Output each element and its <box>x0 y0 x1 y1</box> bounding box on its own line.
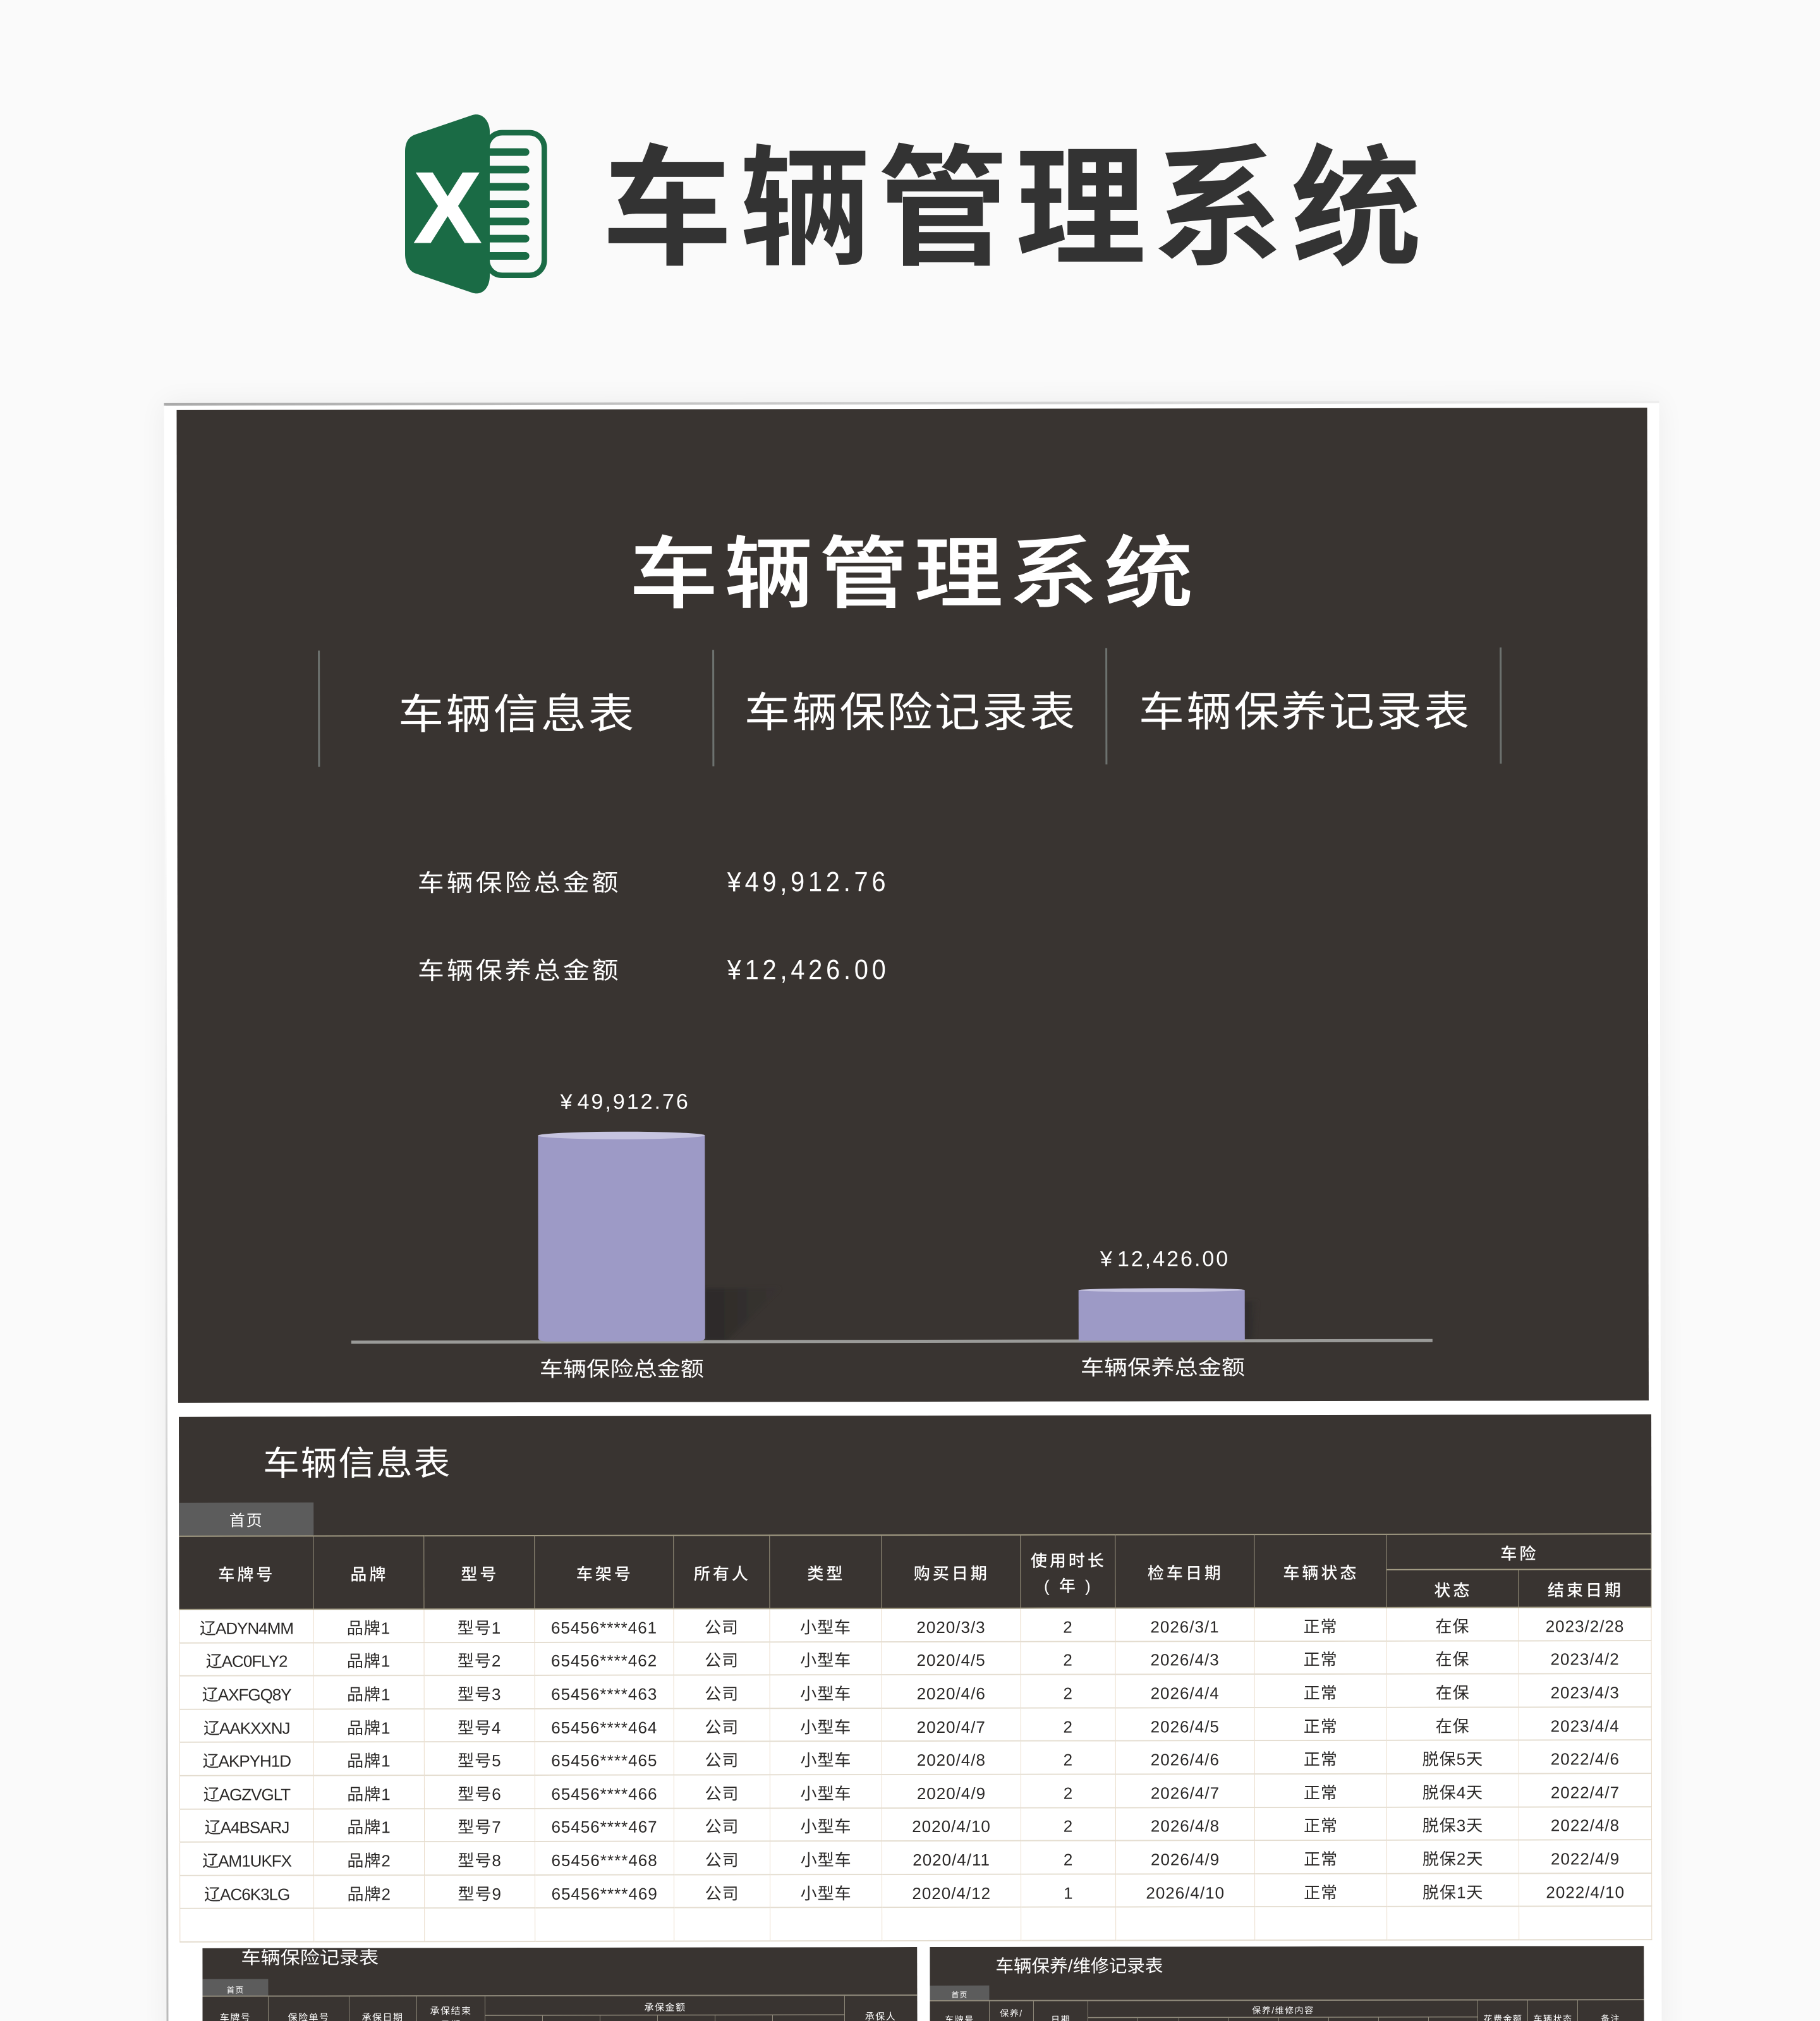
table header: 车架号 <box>576 1564 633 1583</box>
table header: 结束日期 <box>1548 1581 1623 1599</box>
table body: 公司 <box>705 1618 739 1637</box>
table body: 公司 <box>705 1751 739 1770</box>
table body: 2026/3/1 <box>1150 1617 1220 1636</box>
table header labels: 保养/维修内容 <box>1252 2005 1314 2015</box>
icon: Excel logo <box>405 114 547 293</box>
table body: 品牌1 <box>347 1685 391 1704</box>
summary: maintenance total: 车辆保养总金额 <box>418 958 621 985</box>
table body: 脱保2天 <box>1423 1850 1483 1869</box>
table body: 辽A4BSARJ <box>205 1818 289 1837</box>
heading: vehicle information: 车辆信息表 <box>263 1445 451 1483</box>
table body: 2022/4/8 <box>1551 1816 1620 1835</box>
panel: white sheet <box>164 401 1662 2021</box>
table body: 2022/4/6 <box>1551 1749 1620 1769</box>
nav item: maintenance records: 车辆保养记录表 <box>1139 688 1472 735</box>
table header: 品牌 <box>350 1565 388 1584</box>
table header: 检车日期 <box>1148 1563 1223 1582</box>
table body: 2020/4/10 <box>912 1817 991 1836</box>
table body: 2020/4/8 <box>917 1751 986 1769</box>
table body: 正常 <box>1304 1783 1338 1802</box>
table body: 65456****462 <box>551 1651 657 1670</box>
table body: 2026/4/3 <box>1150 1651 1220 1670</box>
axis label: insurance: 车辆保险总金额 <box>540 1357 704 1381</box>
table body: 公司 <box>705 1784 739 1803</box>
table: vehicle information <box>179 1533 1652 1943</box>
button: home <box>179 1502 313 1536</box>
heading: dashboard title: 车辆管理系统 <box>629 530 1199 619</box>
table header: 所有人 <box>694 1564 751 1583</box>
table body: 辽AKPYH1D <box>203 1752 291 1771</box>
table body: 2026/4/8 <box>1151 1817 1220 1836</box>
table body: 品牌2 <box>347 1884 391 1903</box>
button: home: 首页 <box>229 1512 264 1530</box>
table body: 品牌1 <box>347 1751 391 1771</box>
table body: 辽AC6K3LG <box>204 1884 289 1903</box>
table body: 65456****464 <box>551 1718 657 1737</box>
table body: 2022/4/9 <box>1551 1849 1620 1868</box>
table body: 正常 <box>1304 1650 1338 1669</box>
table body: 型号7 <box>458 1818 502 1836</box>
table header labels: 保养/ <box>1000 2008 1023 2018</box>
table body: 脱保1天 <box>1423 1883 1483 1902</box>
heading: maintenance records: 车辆保养/维修记录表 <box>995 1956 1163 1976</box>
table body: 2020/4/6 <box>917 1684 986 1703</box>
table body: 2020/4/9 <box>917 1784 986 1803</box>
table body: 2 <box>1063 1651 1073 1670</box>
table body: 脱保3天 <box>1423 1816 1483 1835</box>
table body: 2 <box>1064 1783 1073 1802</box>
table body: 2023/4/3 <box>1551 1683 1620 1702</box>
table body: 小型车 <box>800 1618 851 1637</box>
panel: insurance record preview <box>202 1947 918 2021</box>
summary: insurance total: 车辆保险总金额 <box>418 870 621 897</box>
table header: 型号 <box>461 1565 499 1584</box>
summary: insurance total: ¥49,912.76 <box>727 866 889 897</box>
table header: 类型 <box>807 1564 845 1583</box>
table body: 小型车 <box>800 1718 851 1737</box>
panel: dashboard <box>176 408 1648 1403</box>
table body: 品牌2 <box>347 1851 391 1870</box>
table body: 脱保5天 <box>1423 1750 1483 1769</box>
table body: 型号6 <box>458 1785 502 1804</box>
navigation links <box>318 647 1502 767</box>
button: home: 首页 <box>951 1991 968 2000</box>
table body: 2 <box>1064 1717 1073 1736</box>
table body: 2020/3/3 <box>916 1618 986 1637</box>
table body: 公司 <box>705 1818 739 1836</box>
table body: 辽AAKXXNJ <box>203 1718 290 1737</box>
bar shadow <box>705 1287 1258 1342</box>
data label: maintenance: ¥12,426.00 <box>1100 1247 1230 1271</box>
table body: 正常 <box>1304 1816 1338 1835</box>
table body: 辽ADYN4MM <box>200 1618 293 1638</box>
panel: maintenance record preview <box>930 1946 1644 2021</box>
table body: 小型车 <box>800 1751 851 1769</box>
icon: Excel logo: X <box>414 151 481 264</box>
table body: 65456****469 <box>552 1884 658 1903</box>
table body: 小型车 <box>800 1784 851 1803</box>
panel: vehicle information header band <box>179 1414 1651 1536</box>
table body <box>179 1608 1652 1943</box>
table header <box>179 1533 1652 1610</box>
table body: 1 <box>1064 1883 1073 1902</box>
table body: 正常 <box>1304 1883 1338 1902</box>
table body: 公司 <box>705 1684 739 1704</box>
table body: 2020/4/12 <box>912 1883 991 1903</box>
table header: 状态 <box>1434 1581 1472 1599</box>
table body: 2 <box>1064 1850 1073 1869</box>
table header: 车牌号 <box>218 1565 275 1584</box>
table body: 在保 <box>1436 1684 1470 1702</box>
table body: 2026/4/4 <box>1151 1684 1220 1702</box>
summary: maintenance total <box>418 954 890 985</box>
table body: 型号8 <box>458 1851 502 1870</box>
table body: 公司 <box>705 1718 739 1737</box>
button: home: 首页 <box>226 1986 244 1995</box>
table body: 小型车 <box>801 1850 852 1869</box>
table body: 2 <box>1064 1751 1073 1769</box>
table header labels: 承保金额 <box>644 2003 686 2013</box>
summary: insurance total <box>418 866 889 897</box>
table body: 在保 <box>1436 1650 1470 1669</box>
table header: 使用时长 <box>1031 1551 1107 1570</box>
table body: 品牌1 <box>347 1718 391 1737</box>
table body: 65456****468 <box>552 1851 658 1870</box>
table body: 65456****467 <box>551 1818 658 1836</box>
table body: 型号1 <box>458 1618 501 1637</box>
table body: 公司 <box>705 1651 739 1670</box>
table body: 辽AM1UKFX <box>202 1851 291 1871</box>
bar chart <box>351 1090 1433 1381</box>
table body: 公司 <box>705 1850 739 1869</box>
table body: 品牌1 <box>347 1818 391 1837</box>
table body: 65456****463 <box>551 1685 657 1704</box>
table body: 65456****461 <box>551 1618 657 1637</box>
table body: 在保 <box>1436 1716 1470 1735</box>
table header labels <box>220 2002 896 2021</box>
table body: 型号2 <box>458 1651 501 1671</box>
table body: 辽AC0FLY2 <box>206 1652 288 1671</box>
button: home <box>202 1979 268 1996</box>
table body: 2 <box>1064 1817 1073 1836</box>
table header labels <box>945 2005 1620 2021</box>
table body: 在保 <box>1435 1617 1470 1636</box>
table body: 2026/4/10 <box>1146 1883 1225 1902</box>
nav item: vehicle information: 车辆信息表 <box>398 691 636 737</box>
table body: 2022/4/7 <box>1551 1783 1620 1802</box>
table body: 2026/4/7 <box>1151 1783 1220 1802</box>
page title block <box>405 114 1429 293</box>
table body: 辽AXFGQ8Y <box>202 1685 291 1704</box>
data label: insurance: ¥49,912.76 <box>560 1090 690 1114</box>
table body: 2 <box>1063 1617 1073 1636</box>
table header: ( 年 ) <box>1044 1576 1093 1595</box>
table body: 小型车 <box>800 1818 852 1836</box>
table body: 小型车 <box>801 1884 852 1903</box>
table body: 2 <box>1063 1684 1073 1703</box>
axis <box>351 1339 1433 1344</box>
table body: 65456****465 <box>551 1751 657 1770</box>
table header: 购买日期 <box>914 1563 990 1582</box>
table body: 2020/4/5 <box>916 1651 986 1670</box>
table body: 型号5 <box>458 1751 502 1770</box>
bar: maintenance total <box>1079 1288 1245 1341</box>
table body: 正常 <box>1304 1850 1338 1869</box>
table body: 正常 <box>1304 1684 1338 1702</box>
table header labels: 承保结束 <box>430 2006 472 2017</box>
table body: 品牌1 <box>347 1652 391 1671</box>
table body: 2022/4/10 <box>1546 1883 1625 1902</box>
table body: 65456****466 <box>551 1784 658 1804</box>
table body: 品牌1 <box>347 1618 391 1637</box>
table body: 型号3 <box>458 1685 501 1704</box>
table body: 小型车 <box>800 1684 851 1703</box>
table body: 正常 <box>1304 1717 1338 1736</box>
axis label: maintenance: 车辆保养总金额 <box>1081 1356 1245 1380</box>
table body: 2023/4/4 <box>1551 1716 1620 1735</box>
table body: 型号4 <box>458 1718 502 1737</box>
table body: 2026/4/9 <box>1151 1850 1220 1869</box>
table header: 车辆状态 <box>1283 1563 1359 1582</box>
table body: 脱保4天 <box>1423 1783 1483 1802</box>
table body: 辽AGZVGLT <box>203 1785 290 1804</box>
table body: 正常 <box>1304 1750 1338 1769</box>
table body: 2023/2/28 <box>1546 1617 1624 1636</box>
table body: 2026/4/5 <box>1151 1717 1220 1736</box>
heading: main title: 车辆管理系统 <box>602 137 1429 282</box>
table body: 型号9 <box>458 1884 502 1903</box>
table body: 2023/4/2 <box>1550 1650 1620 1669</box>
table header: 车险 <box>1500 1544 1538 1563</box>
table body: 正常 <box>1303 1617 1338 1636</box>
bar: insurance total <box>538 1132 705 1342</box>
table body: 公司 <box>705 1884 739 1903</box>
table body: 品牌1 <box>347 1785 391 1804</box>
table body: 2026/4/6 <box>1151 1750 1220 1769</box>
table body: 2020/4/11 <box>913 1850 990 1869</box>
table body: 2020/4/7 <box>917 1717 986 1737</box>
summary: maintenance total: ¥12,426.00 <box>727 954 890 985</box>
table body: 小型车 <box>800 1651 851 1670</box>
heading: insurance records: 车辆保险记录表 <box>241 1948 379 1968</box>
nav item: insurance records: 车辆保险记录表 <box>744 689 1077 736</box>
button: home <box>930 1986 989 2001</box>
